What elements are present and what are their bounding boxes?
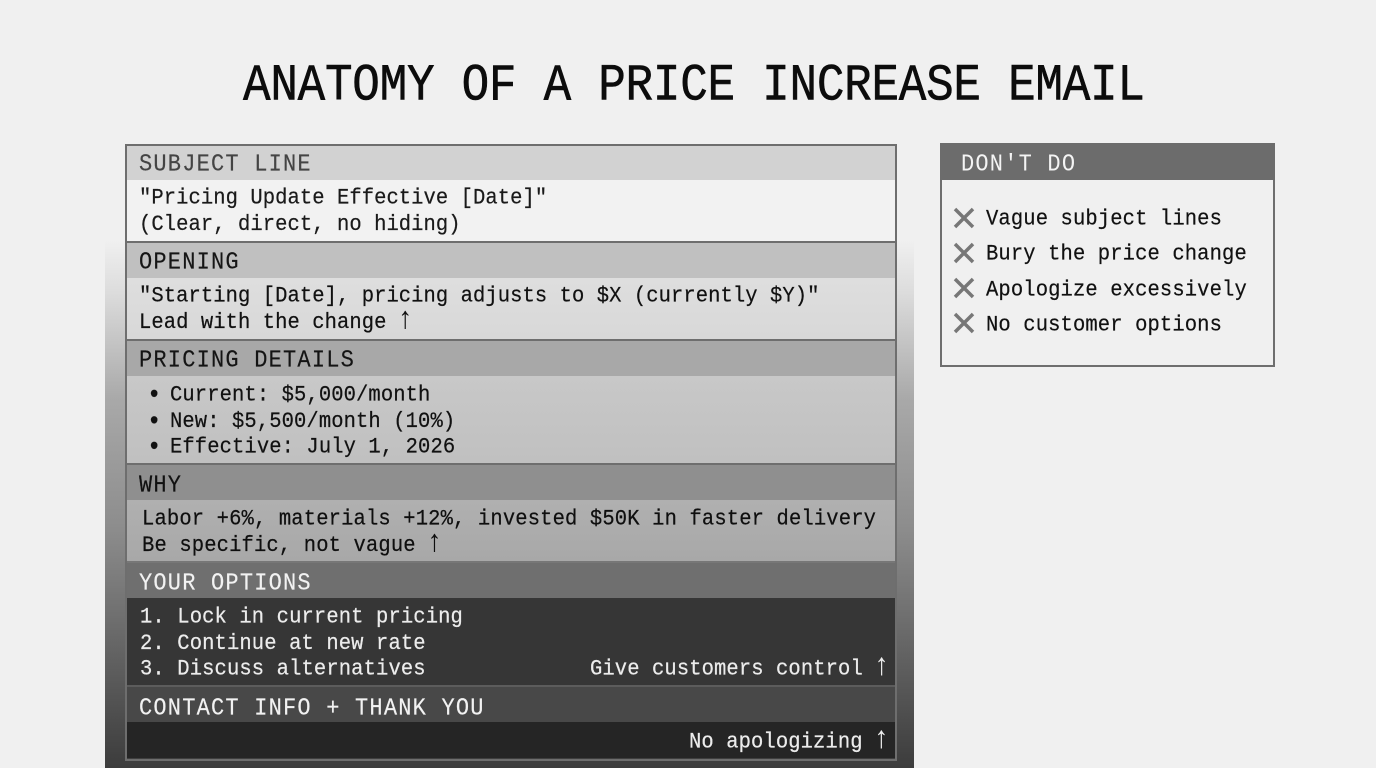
section: opening	[127, 243, 895, 339]
text: subject line body	[127, 180, 895, 241]
section: why	[127, 465, 895, 561]
text: options list: 1. Lock in current pricing 2. Continue at new rate 3. Discuss alternatives	[140, 605, 463, 682]
heading: pricing details	[127, 341, 895, 376]
heading: why	[127, 465, 895, 500]
heading: your options	[127, 563, 895, 598]
text: item: Vague subject lines	[986, 207, 1222, 232]
text: pricing details list: • • •	[147, 382, 161, 464]
text: item: No customer options	[986, 313, 1222, 338]
section: contact info	[127, 687, 895, 758]
text: opening body: "Starting [Date], pricing adjusts to $X (currently $Y)" Lead with the change	[139, 284, 819, 335]
text: contact note	[127, 722, 895, 758]
icon: x	[954, 208, 974, 228]
heading: don't do	[940, 143, 1275, 180]
text: opening body: ↑	[397, 303, 414, 338]
background gradient behind email	[105, 240, 914, 768]
text: subject line body: "Pricing Update Effective [Date]" (Clear, direct, no hiding)	[139, 186, 547, 237]
text: options list: ↑	[873, 650, 890, 684]
item: no customer options	[954, 312, 1222, 338]
text: why body: Labor +6%, materials +12%, invested $50K in faster delivery Be specific, not vague	[142, 507, 876, 558]
text: contact note: No apologizing	[689, 730, 863, 755]
heading: contact info: CONTACT INFO + THANK YOU	[139, 695, 485, 722]
heading: subject line	[127, 146, 895, 180]
section: your options	[127, 563, 895, 685]
title: ANATOMY OF A PRICE INCREASE EMAIL	[243, 57, 1145, 115]
icon: x	[954, 278, 974, 298]
text: item: Apologize excessively	[986, 278, 1247, 303]
heading: your options: YOUR OPTIONS	[139, 570, 312, 597]
panel: don't do	[940, 143, 1275, 367]
heading: pricing details: PRICING DETAILS	[139, 347, 355, 374]
text: options list: Give customers control	[590, 657, 863, 682]
text: why body: ↑	[426, 526, 443, 561]
heading: why: WHY	[139, 472, 182, 499]
item: bury the price change	[954, 242, 1247, 267]
text: pricing details list: Current: $5,000/month New: $5,500/month (10%) Effective: July 1, 2026	[170, 383, 455, 460]
panel: email anatomy	[125, 144, 897, 761]
icon: x	[954, 242, 974, 264]
text: pricing details list	[127, 376, 895, 463]
icon: x	[954, 312, 974, 334]
item: apologize excessively	[954, 278, 1247, 303]
heading: opening: OPENING	[139, 249, 240, 276]
section: pricing details	[127, 341, 895, 464]
text: item: Bury the price change	[986, 242, 1247, 267]
section: subject line	[127, 146, 895, 237]
text: options list	[127, 598, 895, 685]
heading: opening	[127, 243, 895, 278]
heading: subject line: SUBJECT LINE	[139, 151, 312, 178]
heading: don't do: DON'T DO	[961, 151, 1076, 178]
text: contact note: ↑	[873, 723, 890, 758]
item: vague subject lines	[954, 207, 1222, 232]
heading: contact info	[127, 687, 895, 722]
